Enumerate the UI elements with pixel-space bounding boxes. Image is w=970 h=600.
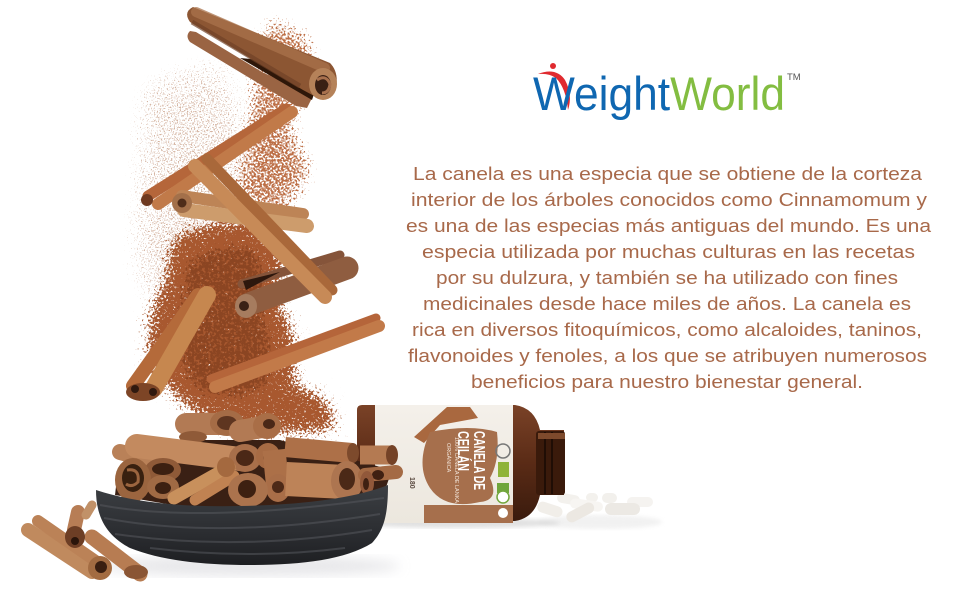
cinnamon powder cloud	[115, 10, 335, 433]
label capsule count: 180	[408, 477, 415, 489]
bowl body	[96, 485, 388, 565]
certification badges	[496, 444, 510, 518]
cinnamon stick: long diagonal pair	[195, 159, 332, 297]
bottle body glass	[357, 405, 564, 521]
bottle neck	[536, 431, 565, 495]
description text block: especia utilizada por muchas culturas en las recetas	[422, 241, 915, 262]
logo wordmark: WeightWorld	[533, 67, 785, 120]
bottle label	[375, 405, 513, 523]
logo figure swoosh	[538, 63, 570, 110]
cinnamon stick: horizontal roll behind	[172, 193, 307, 226]
description text block: flavonoides y fenoles, a los que se atribuyen numerosos	[408, 345, 927, 366]
description text block: beneficios para nuestro bienestar general.	[471, 371, 863, 392]
cinnamon stick: large top roll	[187, 7, 337, 108]
description text block: interior de los árboles conocidos como Cinnamomum y	[411, 189, 928, 210]
description text block: medicinales desde hace miles de años. La canela es	[423, 293, 911, 314]
label brown shape	[422, 428, 498, 504]
label bottom strip	[424, 505, 513, 523]
cinnamon stick: brown roll right	[235, 255, 347, 318]
label cinnamon illustration	[414, 407, 478, 443]
bowl of cinnamon sticks	[96, 410, 400, 576]
supplement bottle	[357, 405, 565, 528]
label product name: CEILÁN	[454, 431, 471, 471]
cinnamon stick: crossed pair upper	[141, 109, 292, 206]
capsules	[536, 492, 662, 529]
bowl dark interior	[115, 440, 392, 508]
bowl shadow	[100, 556, 400, 576]
sticks in bowl	[115, 410, 398, 507]
label product name: CANELA DE	[470, 431, 487, 490]
label small text: 100% CANELA DE LANKA	[453, 437, 459, 503]
label product name	[454, 431, 487, 490]
description text block: La canela es una especia que se obtiene de la corteza	[413, 163, 923, 184]
logo: WeightWorld	[533, 63, 801, 120]
description text block: rica en diversos fitoquímicos, como alcaloides, taninos,	[412, 319, 922, 340]
cinnamon stick: lower left pair	[126, 295, 207, 401]
description text block	[406, 163, 932, 392]
label small text	[445, 437, 459, 503]
cinnamon stick: long thin pair	[211, 318, 379, 387]
logo trademark: TM	[787, 72, 801, 83]
loose cinnamon sticks on table	[28, 505, 148, 580]
label small text: ORGÁNICA	[445, 443, 452, 473]
description text block: por su dulzura, y también se ha utilizado con fines	[436, 267, 898, 288]
description text block: es una de las especias más antiguas del mundo. Es una	[406, 215, 932, 236]
